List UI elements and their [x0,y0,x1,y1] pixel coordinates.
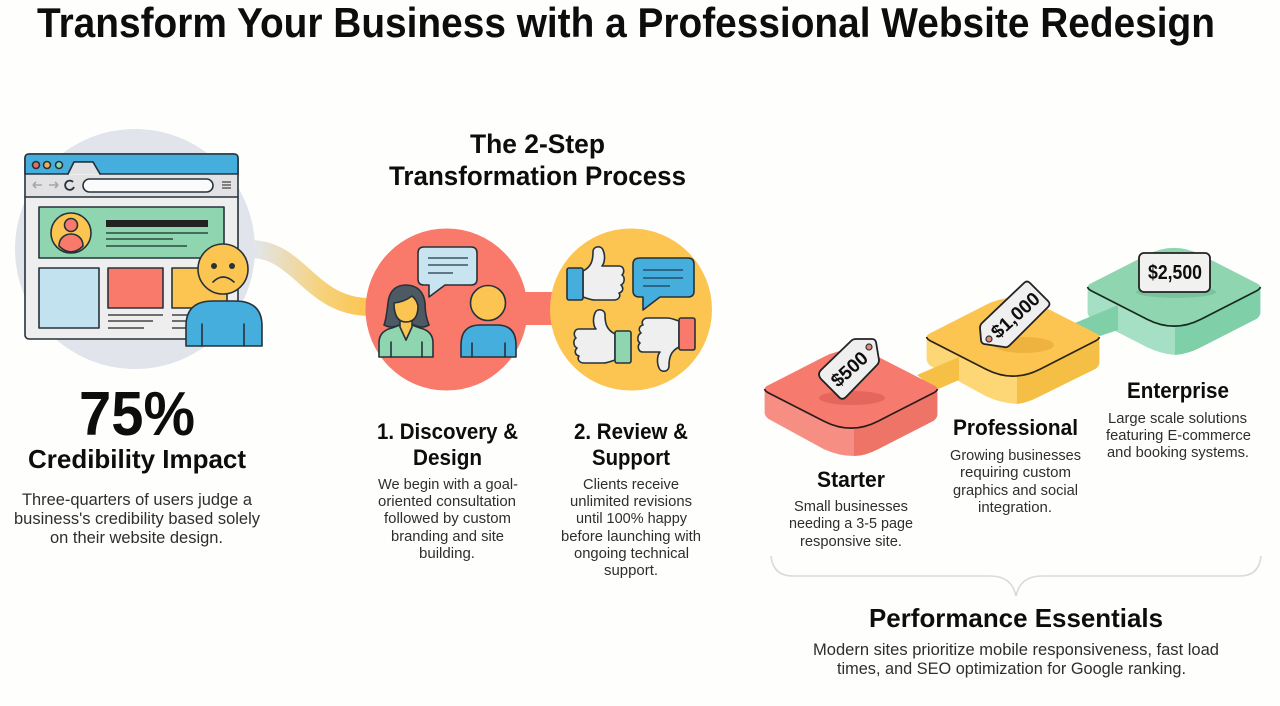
heading: process [389,129,686,191]
step 1 description: followed by custom [384,510,511,527]
step 2 description: unlimited revisions [570,493,692,510]
price tag $2,500: $2,500 [1148,262,1202,284]
arrow: link starter to professional [917,357,959,390]
price tag $500 [819,339,879,399]
panel: starter text [789,467,913,550]
panel: enterprise text [1106,378,1251,461]
stat description: Three-quarters of users judge a [22,491,253,509]
stat heading: Credibility Impact [28,444,246,474]
step 1 heading [377,419,518,470]
step 2 description: until 100% happy [576,510,687,527]
step 1 description: We begin with a goal- [378,476,518,493]
icon: man [461,286,516,357]
panel: starter tier block [765,339,937,456]
stat description: on their website design. [50,529,223,547]
price tag $2,500 [1139,253,1210,292]
step 1 description: building. [419,545,475,562]
yellow block [927,298,1099,404]
heading: process: Transformation Process [389,161,686,191]
starter description: Small businesses [794,498,908,515]
price tag $500: $500 [827,348,873,392]
stat description: business's credibility based solely [14,510,261,528]
icon: unhappy user [186,244,262,346]
icon: browser window [25,154,238,339]
performance description [813,641,1219,678]
step 1 description: branding and site [391,528,504,545]
enterprise heading: Enterprise [1127,378,1229,403]
panel: professional text [950,415,1081,516]
panel: performance essentials [813,603,1219,678]
professional heading: Professional [953,415,1078,440]
step 2 description: ongoing technical [574,545,689,562]
step 2 heading: 2. Review & [574,419,688,444]
panel: step 1 illustration [366,228,528,390]
step 2 description [561,476,701,579]
step 1 heading: Design [413,445,482,470]
step 1 description [378,476,518,562]
professional description: Growing businesses [950,447,1081,464]
icon: woman [379,285,433,357]
stat description [14,491,261,547]
step 2 description: before launching with [561,528,701,545]
step 1 heading: 1. Discovery & [377,419,518,444]
icon: speech bubble [418,247,477,297]
enterprise description: and booking systems. [1107,444,1249,461]
arrow: connector from credibility to process [250,249,370,307]
starter description [789,498,913,550]
step 2 description: support. [604,562,658,579]
price tag $1,000: $1,000 [987,289,1045,343]
price tag $1,000 [980,282,1050,347]
professional description: integration. [978,499,1052,516]
performance heading: Performance Essentials [869,603,1163,633]
icon: blue comment bubble [633,258,694,310]
icon: thumbs down red [638,318,695,371]
starter description: needing a 3-5 page [789,515,913,532]
red block [765,350,937,456]
professional description: graphics and social [953,482,1078,499]
panel: enterprise tier block [1075,248,1260,355]
starter heading: Starter [817,467,885,492]
professional description: requiring custom [960,464,1071,481]
panel: step 2 illustration [550,228,712,390]
step 1 description: oriented consultation [378,493,516,510]
panel: professional tier block [917,282,1099,404]
panel: credibility statistic [14,380,261,547]
step 2 heading: Support [592,445,671,470]
step 2 description: Clients receive [583,476,679,493]
panel: credibility illustration [15,129,262,369]
panel: step 2 text [561,419,701,579]
arrow: link between steps [520,292,556,325]
icon: thumbs up blue [567,247,624,300]
performance description: times, and SEO optimization for Google ranking. [837,660,1186,678]
big number: 75% [79,380,195,449]
arrow: link professional to enterprise [1075,305,1118,336]
professional description [950,447,1081,516]
grey backdrop circle [15,129,255,369]
heading: process: The 2-Step [470,129,605,159]
step 2 heading [574,419,688,470]
panel: step 1 text [377,419,518,562]
bracket [771,556,1261,596]
starter description: responsive site. [800,533,902,550]
red circle [366,228,528,390]
enterprise description [1106,410,1251,461]
performance description: Modern sites prioritize mobile responsiveness, fast load [813,641,1219,659]
icon: thumbs up green [574,310,631,363]
green block [1088,248,1260,355]
yellow circle [550,228,712,390]
enterprise description: featuring E-commerce [1106,427,1251,444]
enterprise description: Large scale solutions [1108,410,1247,427]
